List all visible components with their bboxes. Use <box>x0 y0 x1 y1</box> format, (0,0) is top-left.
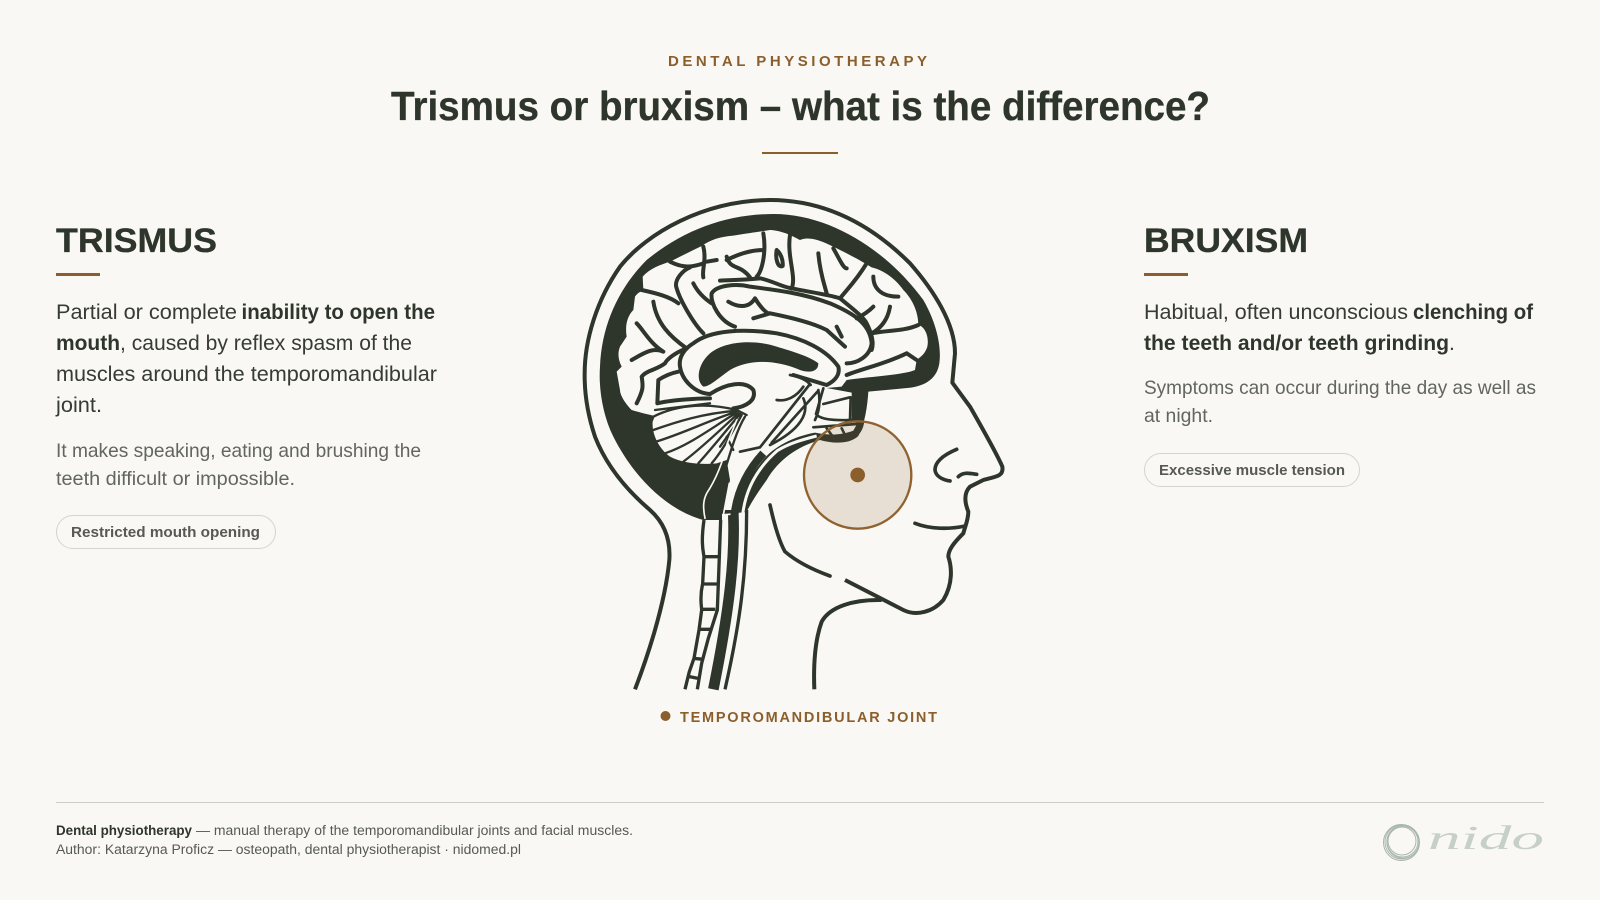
logo: nido: nido <box>1428 820 1544 857</box>
brain folds <box>632 233 918 408</box>
jawline <box>770 505 830 576</box>
text block: trismus definition: Partial or complete <box>56 301 237 324</box>
thin white strands <box>704 420 737 518</box>
text block: trismus definition <box>55 301 437 417</box>
text block: bruxism definition <box>1144 301 1534 355</box>
tag: restricted mouth opening <box>56 516 276 548</box>
text block: trismus definition: joint. <box>55 394 102 417</box>
text block: trismus symptoms <box>56 440 421 490</box>
parietal gyrus <box>711 285 872 363</box>
text block: bruxism definition: Habitual, often unconscious <box>1144 301 1408 324</box>
text block: trismus symptoms: teeth difficult or impossible. <box>56 468 295 490</box>
tag: excessive muscle tension <box>1144 454 1360 486</box>
spinal cord <box>713 515 734 689</box>
text block: trismus definition: inability to open the <box>242 301 435 324</box>
eyebrow: DENTAL PHYSIOTHERAPY <box>668 53 927 70</box>
heading: bruxism: BRUXISM <box>1144 222 1308 260</box>
footer credits: — manual therapy of the temporomandibular joints and facial muscles. <box>196 823 633 838</box>
text block: bruxism definition: clenching of <box>1413 301 1534 324</box>
mouth <box>915 523 965 528</box>
accent rule: trismus <box>56 273 100 276</box>
caption: temporomandibular joint: TEMPOROMANDIBULAR JOINT <box>680 710 937 726</box>
heading: trismus: TRISMUS <box>56 222 217 260</box>
vertebral column <box>685 520 721 689</box>
text block: trismus symptoms: It makes speaking, eating and brushing the <box>56 440 421 462</box>
logo: nido <box>1384 820 1544 860</box>
head anatomy illustration <box>585 200 1003 689</box>
lateral ventricle <box>699 342 818 387</box>
cerebellum <box>653 403 747 470</box>
tag: excessive muscle tension: Excessive muscle tension <box>1159 462 1345 479</box>
text block: bruxism symptoms: at night. <box>1144 405 1213 427</box>
neck front <box>814 600 882 689</box>
text block: bruxism definition: the teeth and/or teeth grinding <box>1144 332 1449 355</box>
corpus callosum outline <box>680 331 839 394</box>
brain white mass <box>617 230 928 510</box>
joint highlight <box>804 421 911 529</box>
footer credits <box>56 823 633 857</box>
tag: restricted mouth opening: Restricted mouth opening <box>71 524 260 541</box>
footer credits: Author: Katarzyna Proficz — osteopath, dental physiotherapist · nidomed.pl <box>56 842 521 857</box>
text block: trismus definition: muscles around the temporomandibular <box>56 363 437 386</box>
nostril <box>935 449 977 481</box>
head outline <box>585 200 1003 689</box>
title: Trismus or bruxism – what is the difference? <box>391 83 1210 129</box>
text block: trismus definition: mouth <box>56 332 120 355</box>
footer credits: Dental physiotherapy <box>56 823 192 838</box>
gap below skull cavity beside spine <box>722 512 749 527</box>
text block: bruxism definition: . <box>1449 332 1455 355</box>
panel: trismus <box>55 222 437 548</box>
skull cavity <box>600 214 940 520</box>
text block: trismus definition: , caused by reflex spasm of the <box>120 332 412 355</box>
title underline <box>762 152 838 154</box>
panel: bruxism <box>1144 222 1536 486</box>
text block: bruxism symptoms <box>1144 377 1536 427</box>
text block: bruxism symptoms: Symptoms can occur during the day as well as <box>1144 377 1536 399</box>
white gap beside spinal cord <box>743 436 817 515</box>
sphenoid stem <box>847 393 862 439</box>
accent rule: bruxism <box>1144 273 1188 276</box>
brain stem strands <box>740 375 857 452</box>
footer divider <box>56 802 1544 803</box>
